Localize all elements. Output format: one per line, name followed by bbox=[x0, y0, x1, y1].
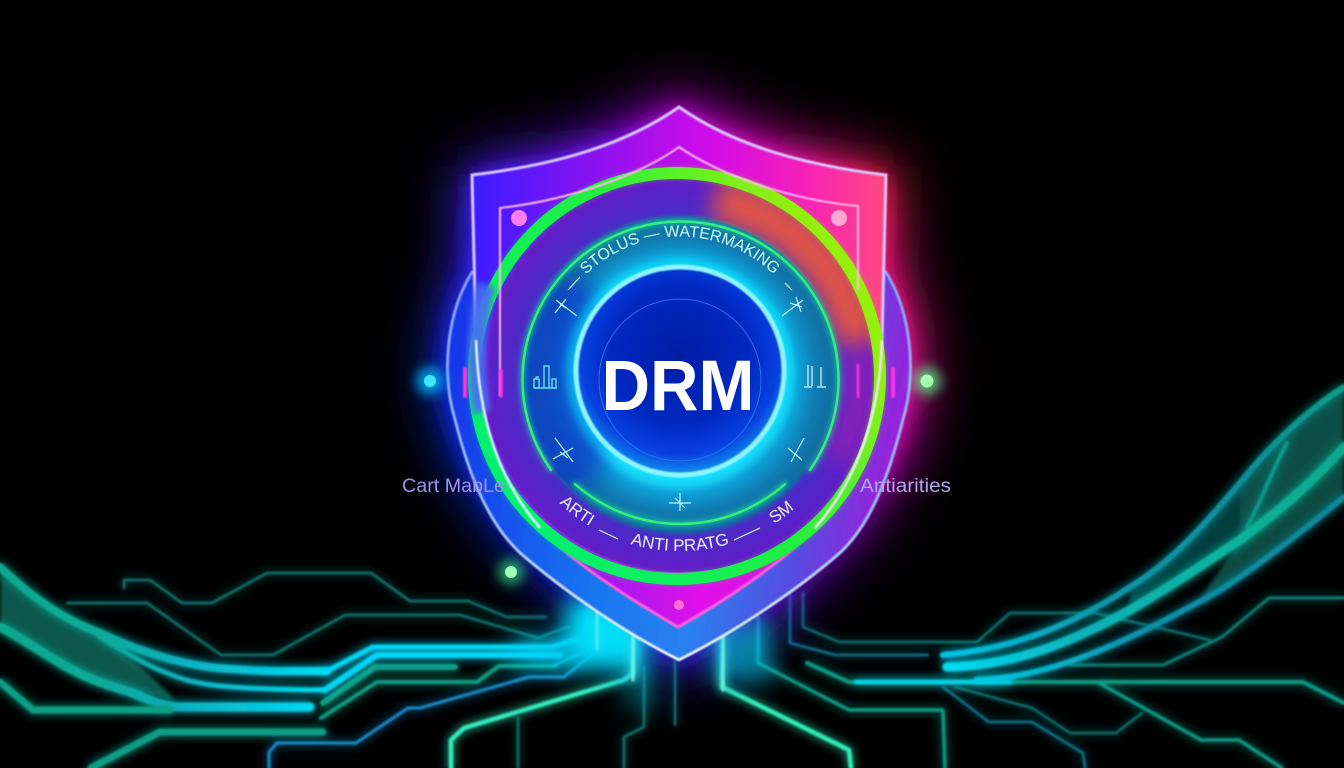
bright right green trace bbox=[722, 637, 851, 768]
ring disk bbox=[474, 173, 882, 579]
shield bbox=[447, 107, 911, 660]
translucent band over ring left bbox=[477, 285, 486, 412]
vertical traces under shield bbox=[597, 600, 723, 725]
cyan traces into shield bbox=[325, 603, 598, 690]
blue tint inside annulus left bbox=[524, 268, 618, 498]
cyan node bbox=[416, 367, 444, 395]
right label: Antiarities bbox=[860, 476, 951, 497]
green node lower bbox=[498, 559, 524, 585]
dim traces bbox=[67, 573, 568, 655]
curved labels: bottom bbox=[559, 497, 794, 551]
icon: left tower glyph bbox=[534, 366, 557, 388]
dark bands between right curves bbox=[1130, 387, 1344, 610]
bright green trace bbox=[451, 640, 633, 768]
icon: cross marks bbox=[553, 297, 804, 511]
small connector dashes bbox=[568, 277, 792, 540]
circuit traces: left bbox=[0, 567, 644, 768]
warm tint upper right bbox=[715, 200, 860, 345]
title: DRM: DRM bbox=[602, 347, 754, 426]
icon: right bars glyph bbox=[804, 365, 826, 387]
shield outline bbox=[472, 107, 886, 340]
inner shield chevron line bbox=[500, 147, 858, 396]
core circle bbox=[574, 265, 786, 477]
curved label: top: STOLUS — WATERMAKING bbox=[580, 225, 779, 273]
white shield edges bbox=[476, 340, 540, 528]
teal straight traces bbox=[0, 666, 555, 768]
shield glow bbox=[447, 107, 911, 660]
blue trace bbox=[269, 650, 600, 768]
green node right bbox=[913, 367, 941, 395]
thin right traces bbox=[790, 593, 1344, 768]
thick right curves bbox=[943, 387, 1344, 680]
cyan section bbox=[856, 680, 1010, 684]
node dots bbox=[416, 367, 941, 585]
thick green ring glow bbox=[474, 173, 880, 579]
label ARTI: ARTI bbox=[559, 497, 594, 526]
left label: Cart MabLe bbox=[402, 476, 505, 497]
thick green ring bbox=[474, 173, 880, 579]
thick curves bbox=[0, 567, 327, 707]
pink side bars bbox=[465, 365, 893, 397]
lower magenta plate bbox=[476, 350, 882, 627]
magenta tint right bbox=[835, 350, 859, 460]
upper shield plate bbox=[472, 107, 886, 627]
circuit traces: right bbox=[722, 387, 1344, 768]
decorative dots: top corners bbox=[511, 210, 847, 226]
label ANTI PRATG: ANTI PRATG bbox=[630, 534, 728, 551]
glow under shield tip bbox=[515, 600, 772, 710]
outer lower shield body bbox=[447, 272, 911, 660]
label SM: SM bbox=[770, 500, 794, 522]
dark band between thick curves bbox=[0, 567, 175, 700]
thin green ring bbox=[522, 221, 838, 524]
lower pink edge bbox=[540, 528, 815, 627]
tip dot bbox=[674, 600, 684, 610]
